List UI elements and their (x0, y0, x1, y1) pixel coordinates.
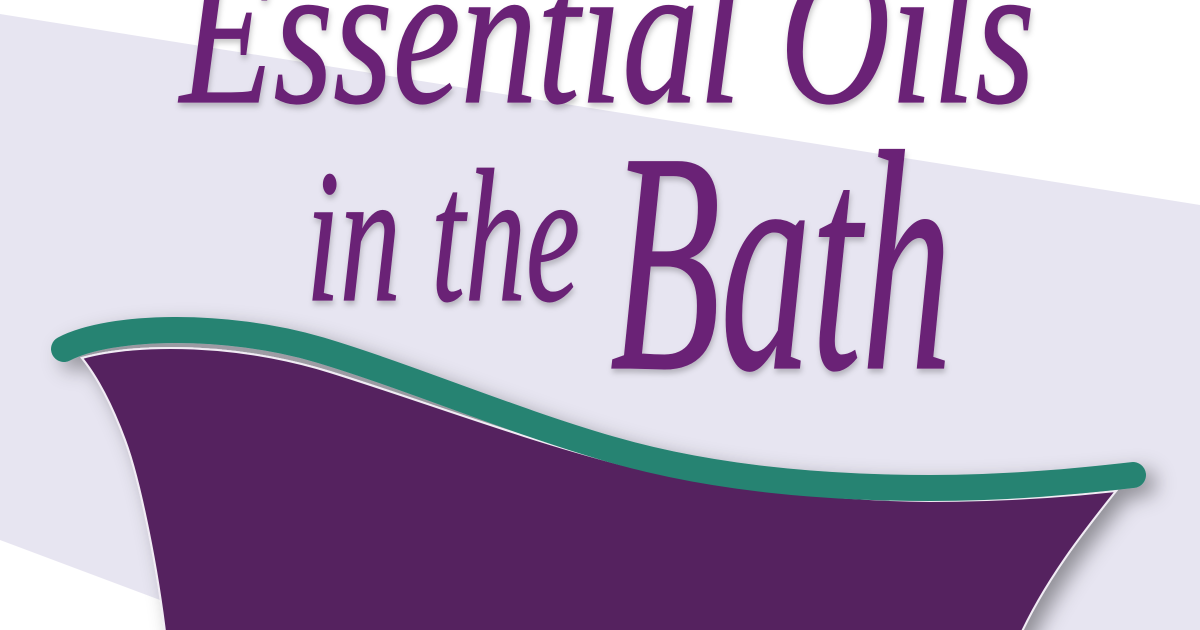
icon: bathtub (64, 330, 1133, 630)
title line: in the: in the (306, 132, 580, 342)
tub body (82, 348, 1116, 630)
tub rim (64, 330, 1133, 488)
title line: Bath: Bath (610, 88, 952, 437)
title (178, 0, 1035, 437)
